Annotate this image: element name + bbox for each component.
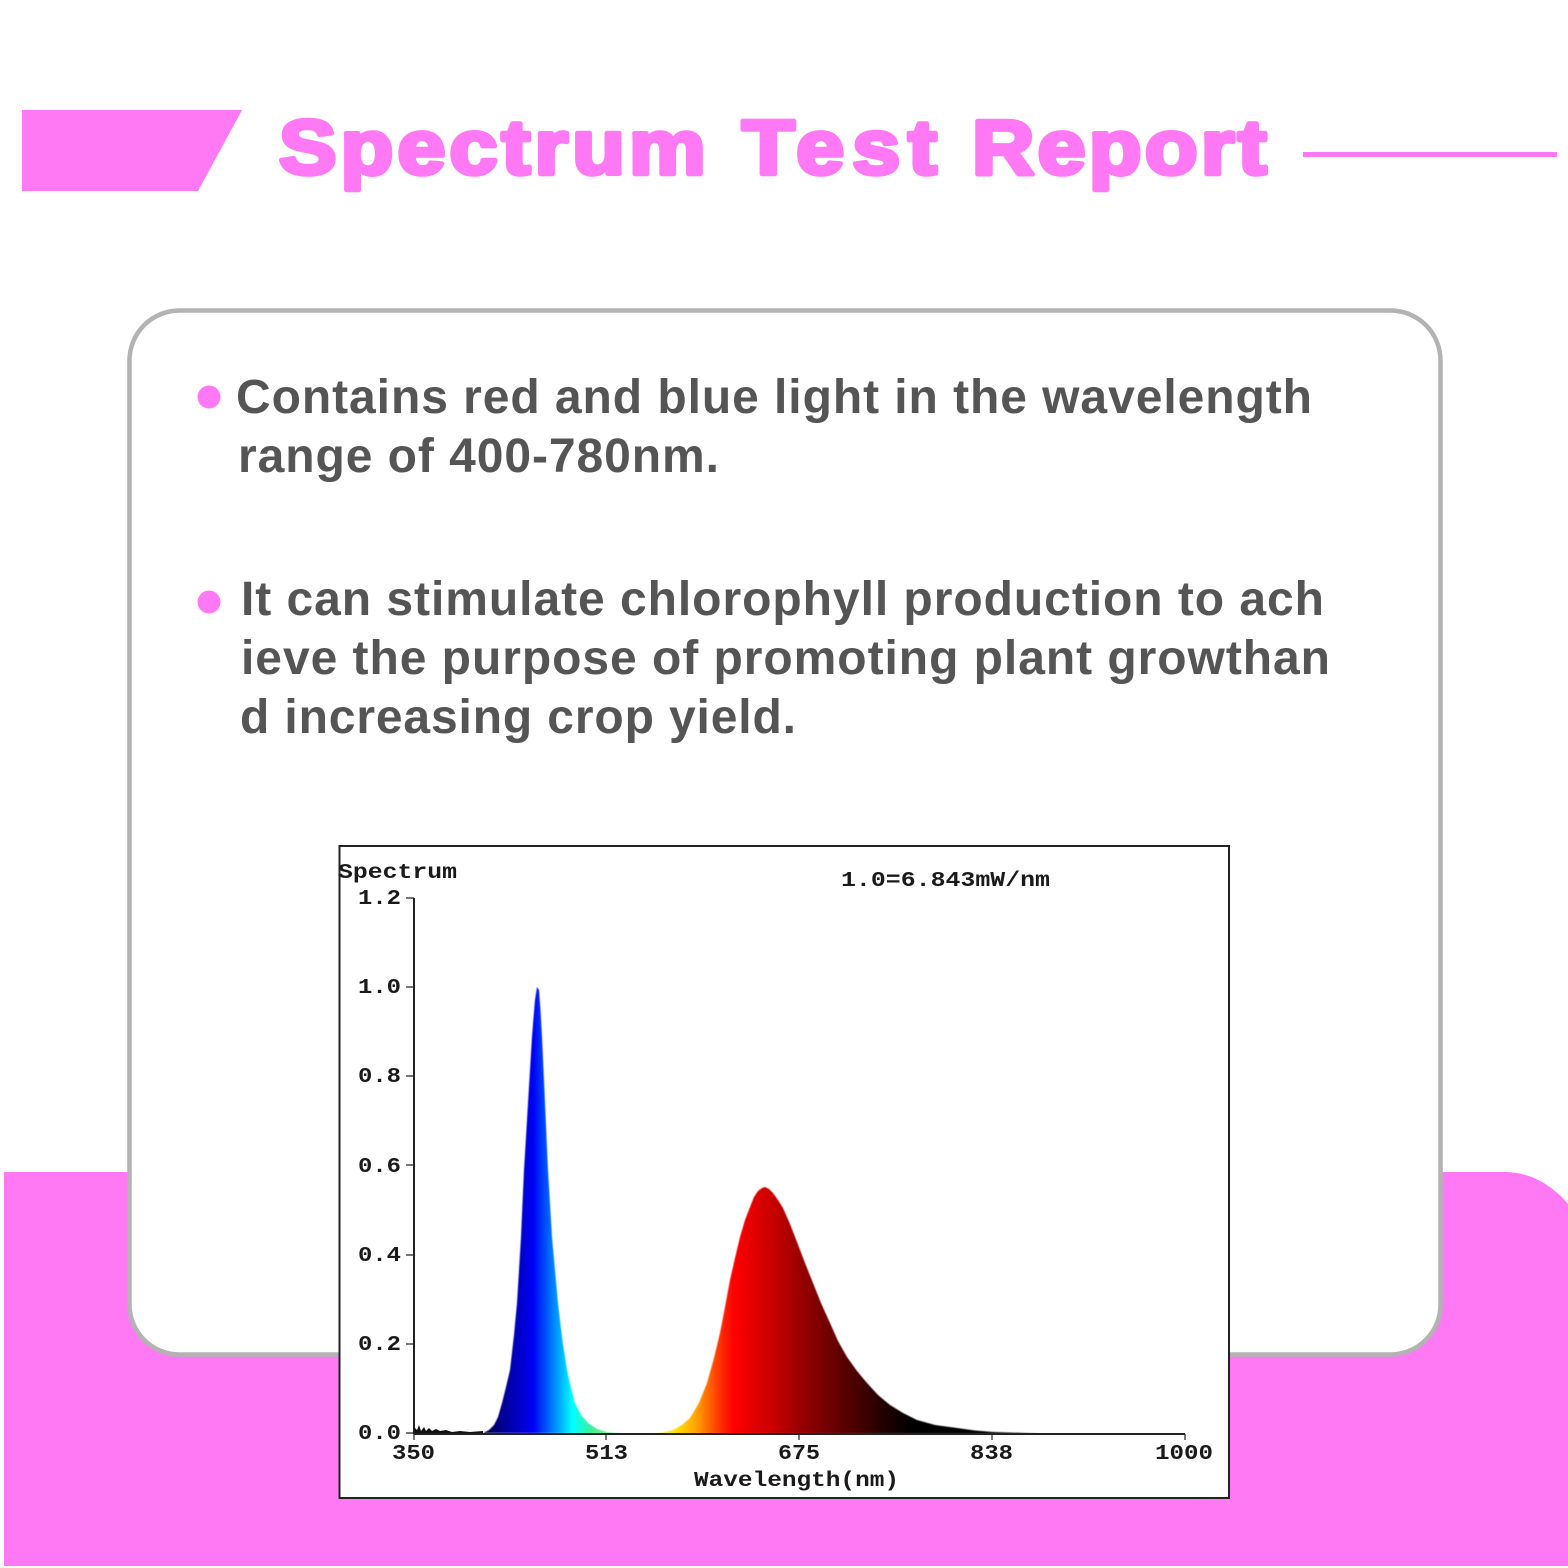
pink footer background [4,1172,1568,1566]
x axis labels: 513 [585,1443,628,1466]
title: Report [972,105,1267,191]
y axis labels: 0.6 [358,1156,401,1179]
x axis labels: 675 [778,1443,820,1466]
title banner shape [22,110,242,191]
text block: plant growth benefit [240,573,1330,744]
x axis labels: 350 [392,1443,435,1466]
panel: spectrum chart [338,846,1229,1498]
red emission peak [650,1187,1040,1434]
title: Spectrum [279,105,706,191]
y axis labels: 0.8 [358,1066,401,1089]
text block: wavelength range: range of 400-780nm. [238,430,719,483]
text block: plant growth benefit: It can stimulate chlorophyll production to ach [241,573,1324,626]
text block: wavelength range [236,371,1312,483]
chart heading: Spectrum [338,862,457,885]
y axis [406,898,414,1434]
bullet one [198,386,220,408]
y axis labels [358,888,401,1446]
text block: plant growth benefit: ieve the purpose of promoting plant growthan [241,632,1330,685]
title rule [1303,152,1557,157]
panel: description card [130,310,1440,1354]
title: Test [742,105,937,191]
y axis labels: 0.0 [358,1423,401,1446]
blue emission peak [483,987,623,1434]
x axis title: Wavelength(nm) [694,1470,899,1493]
title [279,105,1267,191]
y axis labels: 1.0 [358,977,401,1000]
calibration note: 1.0=6.843mW/nm [841,870,1050,893]
x axis labels [392,1443,1213,1466]
x axis labels: 1000 [1155,1443,1213,1466]
y axis labels: 1.2 [358,888,401,911]
y axis labels: 0.4 [358,1245,401,1268]
bullet two [198,590,220,614]
baseline noise [414,1425,483,1434]
x axis labels: 838 [970,1443,1013,1466]
text block: wavelength range: Contains red and blue light in the wavelength [236,371,1312,424]
text block: plant growth benefit: d increasing crop yield. [240,691,796,744]
y axis labels: 0.2 [358,1334,401,1357]
x axis [414,1434,1185,1440]
